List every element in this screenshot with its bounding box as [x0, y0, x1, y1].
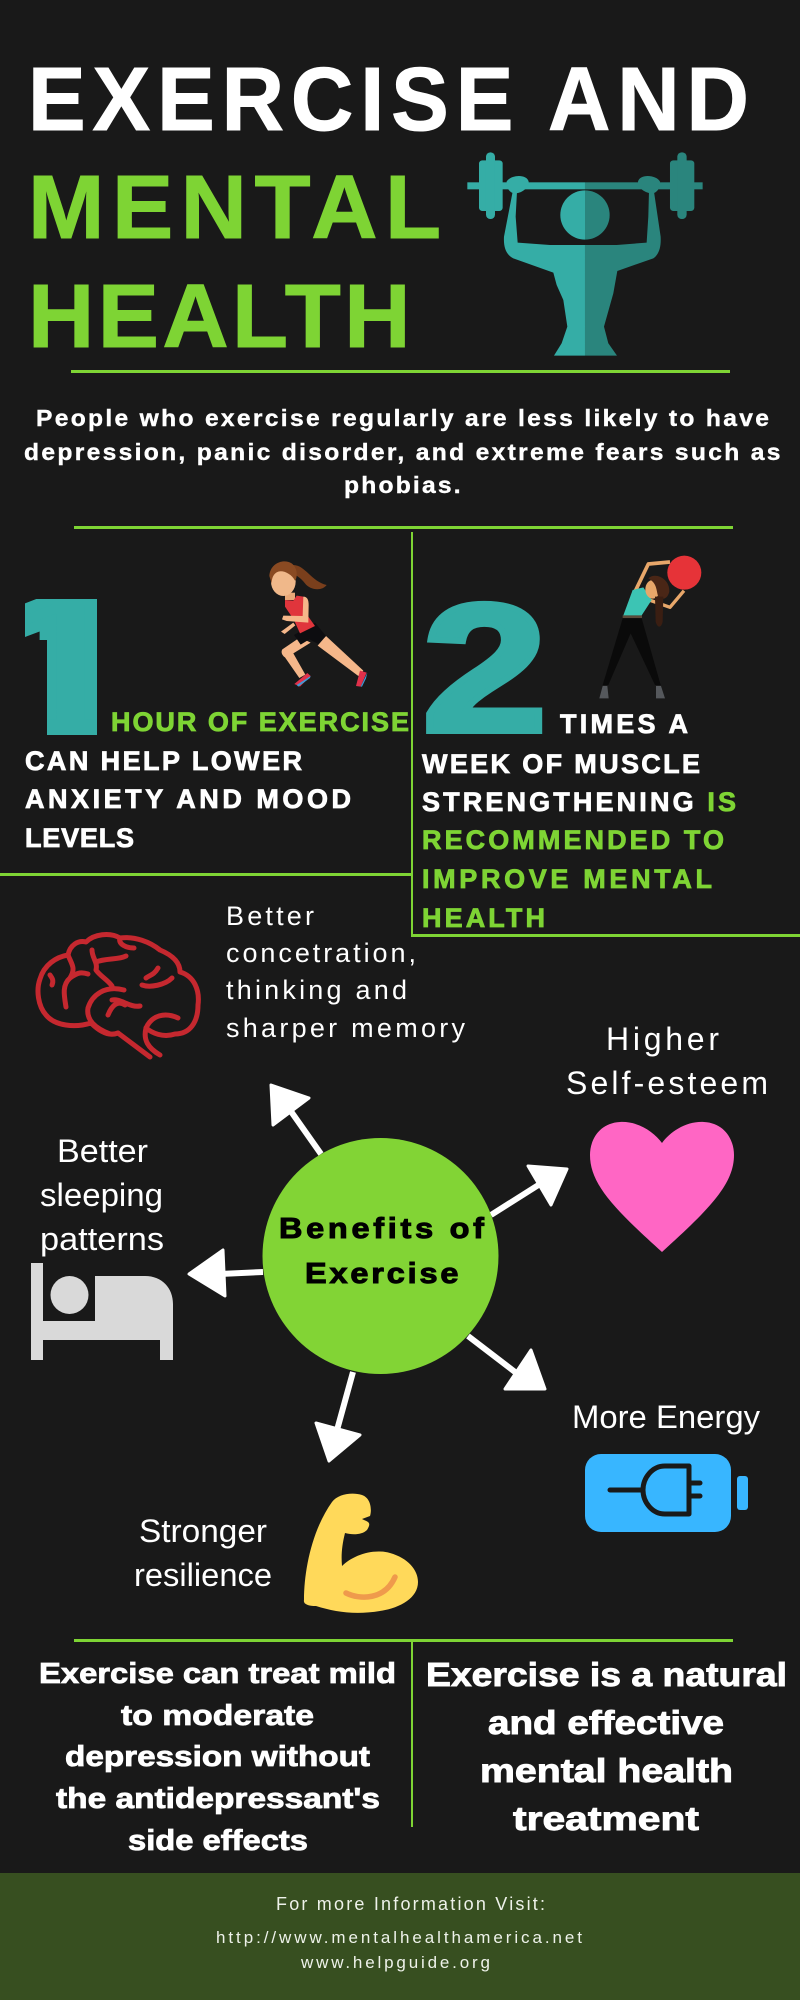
divider under title	[71, 370, 730, 373]
text: higher self-esteem: Self-esteem	[566, 1065, 768, 1101]
text: treat depression: to moderate	[121, 1700, 314, 1732]
text: better sleeping patterns: patterns	[40, 1221, 164, 1257]
arrow: to heart	[491, 1166, 567, 1215]
icon: stretching woman	[599, 556, 701, 698]
icon: runner	[269, 561, 367, 687]
title	[28, 48, 749, 367]
text: higher self-esteem	[566, 1021, 768, 1101]
icon: bed	[31, 1263, 173, 1360]
text: treat depression: side effects	[128, 1825, 308, 1857]
text: hour of exercise: HOUR OF EXERCISE	[111, 707, 409, 737]
text: better concentration: Better	[226, 901, 314, 931]
icon: weightlifter	[467, 152, 703, 356]
intro text: phobias.	[344, 473, 461, 499]
arrow: to battery	[468, 1336, 545, 1389]
text: natural treatment	[426, 1656, 787, 1837]
text: better concentration: sharper memory	[226, 1013, 466, 1043]
panel: one hour of exercise: ANXIETY AND MOOD	[25, 784, 351, 814]
panel: one hour of exercise: LEVELS	[25, 823, 134, 853]
title: EXERCISE AND	[28, 48, 749, 149]
text: treat depression	[39, 1658, 396, 1857]
arrow: to brain	[271, 1085, 321, 1154]
text: better sleeping patterns: Better	[57, 1133, 148, 1169]
benefits circle: Exercise	[305, 1257, 458, 1290]
benefits circle: Benefits of	[279, 1212, 485, 1245]
text: better concentration: thinking and	[226, 975, 407, 1005]
text: natural treatment: mental health	[480, 1752, 733, 1789]
big number 2: 2	[422, 567, 548, 770]
footer	[0, 1873, 800, 2000]
panel: two times a week: RECOMMENDED TO	[422, 825, 724, 855]
text: stronger resilience: Stronger	[139, 1513, 267, 1549]
text: natural treatment: treatment	[513, 1800, 699, 1837]
footer: For more Information Visit:	[276, 1894, 545, 1914]
text: treat depression: depression without	[65, 1741, 370, 1773]
text: stronger resilience	[134, 1513, 272, 1593]
text: better concentration: concetration,	[226, 938, 416, 968]
title: HEALTH	[28, 267, 410, 367]
icon: battery plug	[585, 1454, 748, 1532]
panel: two times a week: WEEK OF MUSCLE	[422, 749, 700, 779]
panel: one hour of exercise	[0, 557, 409, 853]
text: times a week: TIMES A	[560, 709, 688, 739]
text: more energy: More Energy	[572, 1399, 760, 1435]
arrow: to muscle	[316, 1372, 360, 1461]
panel: two times a week: HEALTH	[422, 903, 545, 933]
panel: two times a week	[422, 556, 736, 933]
text: higher self-esteem: Higher	[606, 1021, 719, 1057]
text: better concentration	[226, 901, 466, 1043]
intro text	[24, 406, 780, 499]
intro text: People who exercise regularly are less likely to have	[36, 406, 769, 432]
text: treat depression: the antidepressant's	[56, 1783, 380, 1815]
panel: one hour of exercise: CAN HELP LOWER	[25, 746, 302, 776]
panel: two times a week: STRENGTHENING IS	[422, 787, 736, 817]
benefits circle	[262, 1138, 498, 1374]
title: MENTAL	[28, 158, 441, 258]
footer: www.helpguide.org	[300, 1953, 490, 1972]
footer: http://www.mentalhealthamerica.net	[216, 1928, 582, 1947]
intro text: depression, panic disorder, and extreme fears such as	[24, 440, 780, 466]
icon: brain	[38, 935, 198, 1057]
icon: heart	[590, 1122, 734, 1252]
text: better sleeping patterns	[40, 1133, 164, 1257]
text: stronger resilience: resilience	[134, 1557, 272, 1593]
text: treat depression: Exercise can treat mild	[39, 1658, 396, 1690]
panel: two times a week: IMPROVE MENTAL	[422, 864, 712, 894]
section frame lines	[0, 532, 800, 937]
bottom divider lines	[74, 1639, 733, 1827]
icon: flexed bicep	[304, 1494, 418, 1613]
arrow: to bed	[189, 1250, 263, 1296]
divider under intro	[74, 526, 733, 529]
text: natural treatment: and effective	[488, 1704, 724, 1741]
text: natural treatment: Exercise is a natural	[426, 1656, 787, 1693]
text: better sleeping patterns: sleeping	[40, 1177, 163, 1213]
